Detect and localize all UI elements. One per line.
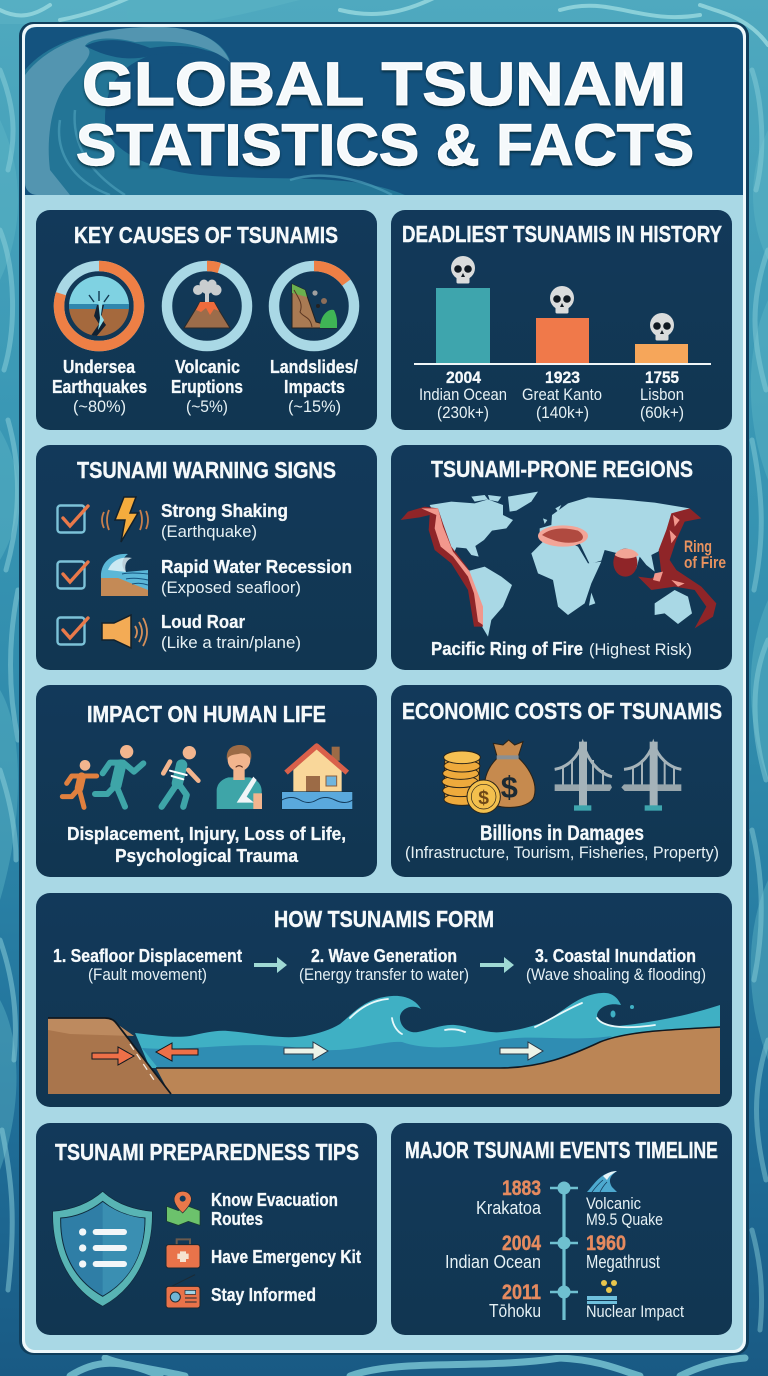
- title: [76, 50, 694, 178]
- label: 1923 Great Kanto: [522, 368, 602, 422]
- text: know evacuation routes: [211, 1190, 338, 1229]
- event: 2011 Tohoku: [489, 1281, 541, 1321]
- icon: radio: [166, 1275, 200, 1308]
- event: 2011 Tohoku: 2011: [502, 1281, 541, 1304]
- label: landslides and impacts: Impacts: [284, 377, 345, 397]
- label: landslides and impacts: [270, 357, 358, 416]
- step 3: coastal inundation: [526, 946, 706, 984]
- text: loud roar: Loud Roar: [161, 612, 245, 632]
- label: volcanic eruptions: (~5%): [186, 398, 228, 416]
- text: loud roar: [161, 612, 301, 652]
- label: undersea earthquakes: Undersea: [63, 357, 136, 377]
- icon: breaking wave: [25, 27, 405, 195]
- icon: broken bridge: [555, 742, 681, 811]
- event: volcanic M9.5 quake: [586, 1195, 663, 1229]
- wave highlights: [350, 999, 655, 1034]
- label: 1923 Great Kanto: 1923: [545, 368, 580, 387]
- caption: billions in damages: [405, 822, 719, 862]
- donut: landslides and impacts 15%: [274, 266, 354, 346]
- text: strong shaking: (Earthquake): [161, 523, 257, 541]
- label: volcanic eruptions: Volcanic: [175, 357, 240, 377]
- icon: injured person: [162, 746, 198, 807]
- icon: wave: [587, 1171, 617, 1192]
- heading: warning signs: TSUNAMI WARNING SIGNS: [77, 457, 336, 483]
- step 2: wave generation: [299, 946, 469, 984]
- panel: tsunami-prone regions: [391, 445, 732, 670]
- event: 2011 Tohoku: Tōhoku: [489, 1301, 541, 1321]
- label: 1923 Great Kanto: Great Kanto: [522, 386, 602, 404]
- water: teal surface with breaking waves: [135, 993, 720, 1068]
- heading: human impact: IMPACT ON HUMAN LIFE: [87, 701, 326, 727]
- text: rapid water recession: (Exposed seafloor): [161, 579, 301, 597]
- icon: money bag: [484, 740, 535, 807]
- callout: ring of fire: [684, 537, 726, 572]
- icon: flooded house: [282, 746, 353, 809]
- bar chart: death tolls: [414, 288, 711, 365]
- panel: deadliest tsunamis in history: [391, 210, 732, 430]
- panel: key causes of tsunamis: [36, 210, 377, 430]
- heading: key causes: KEY CAUSES OF TSUNAMIS: [74, 222, 338, 248]
- event: volcanic M9.5 quake: M9.5 Quake: [586, 1211, 663, 1229]
- text: rapid water recession: Rapid Water Recession: [161, 557, 352, 577]
- label: volcanic eruptions: Eruptions: [171, 377, 243, 397]
- icon: skull 2004: [451, 256, 475, 284]
- label: 1923 Great Kanto: (140k+): [536, 404, 589, 422]
- checkbox: strong shaking: [58, 506, 88, 532]
- label: 2004 Indian Ocean: [419, 368, 507, 422]
- text: have emergency kit: Have Emergency Kit: [211, 1247, 361, 1267]
- event: 2004 Indian Ocean: Indian Ocean: [445, 1252, 541, 1272]
- arrow: wave approaching shore: [500, 1042, 543, 1060]
- water: deep layer: [142, 1036, 612, 1068]
- title: STATISTICS & FACTS: [76, 113, 694, 178]
- event: nuclear impact: Nuclear Impact: [586, 1303, 684, 1321]
- step 1: seafloor displacement: 1. Seafloor Displacement: [53, 946, 242, 966]
- caption: highest risk: Pacific Ring of Fire: [431, 639, 583, 659]
- caption: highest risk: (Highest Risk): [589, 641, 692, 659]
- icon: first aid kit: [166, 1239, 200, 1268]
- event: volcanic M9.5 quake: Volcanic: [586, 1195, 641, 1213]
- text: stay informed: Stay Informed: [211, 1285, 316, 1305]
- arrow: fault pushing left: [156, 1043, 198, 1061]
- checkbox: rapid water recession: [58, 562, 88, 588]
- text: know evacuation routes: Know Evacuation: [211, 1190, 338, 1210]
- caption: human impact summary: [67, 824, 346, 866]
- icon: checklist shield: [53, 1191, 152, 1306]
- event: 1960 megathrust: Megathrust: [586, 1252, 660, 1272]
- icon: money bag: $: [501, 770, 518, 804]
- icon: running adult: [95, 745, 143, 807]
- arrow: fault pushing right: [92, 1047, 134, 1065]
- event: 1883 Krakatoa: Krakatoa: [476, 1198, 542, 1218]
- caption: billions in damages: (Infrastructure, Tourism, Fisheries, Property): [405, 844, 719, 862]
- label: 2004 Indian Ocean: Indian Ocean: [419, 386, 507, 404]
- text: rapid water recession: [161, 557, 352, 597]
- label: undersea earthquakes: (~80%): [73, 398, 126, 416]
- heading: prone regions: TSUNAMI-PRONE REGIONS: [431, 456, 693, 482]
- timeline axis and nodes: [550, 1182, 578, 1320]
- label: 1755 Lisbon: [640, 368, 684, 422]
- icon: nuclear hazard over water: [587, 1280, 617, 1304]
- arrow: step 1 to 2: [254, 957, 287, 973]
- continental block and fault: [48, 1018, 171, 1094]
- icon: coin stack: [442, 751, 480, 805]
- label: volcanic eruptions: [171, 357, 243, 416]
- heading: how tsunamis form: HOW TSUNAMIS FORM: [274, 906, 494, 932]
- label: undersea earthquakes: Earthquakes: [52, 377, 147, 397]
- event: 2004 Indian Ocean: [445, 1232, 541, 1272]
- label: 1755 Lisbon: 1755: [645, 368, 679, 387]
- label: 2004 Indian Ocean: (230k+): [437, 404, 489, 422]
- step 2: wave generation: 2. Wave Generation: [311, 946, 457, 966]
- icon: dollar coin: $: [478, 788, 489, 809]
- arrow: wave travel: [284, 1042, 328, 1060]
- callout: ring of fire: of Fire: [684, 553, 726, 572]
- icon: skull 1755: [650, 313, 674, 340]
- arrow: step 2 to 3: [480, 957, 514, 973]
- panel: major tsunami events timeline: [391, 1123, 732, 1335]
- label: undersea earthquakes: [52, 357, 147, 416]
- icons: people and flooded house: [62, 745, 353, 809]
- donut: volcanic eruptions 5%: [167, 266, 247, 346]
- icon: skull 1923: [550, 286, 574, 314]
- heading: preparedness tips: TSUNAMI PREPAREDNESS TIPS: [55, 1139, 359, 1165]
- caption: human impact summary: Displacement, Injury, Loss of Life,: [67, 824, 346, 844]
- text: strong shaking: [161, 501, 288, 541]
- text: strong shaking: Strong Shaking: [161, 501, 288, 521]
- event: 1960 megathrust: [586, 1232, 660, 1272]
- icon: loudspeaker: [102, 615, 147, 648]
- text: loud roar: (Like a train/plane): [161, 634, 301, 652]
- title: GLOBAL TSUNAMI: [82, 50, 686, 118]
- cross-section diagram: tsunami formation: [48, 993, 720, 1094]
- caption: human impact summary: Psychological Trauma: [115, 846, 299, 866]
- label: 2004 Indian Ocean: 2004: [446, 368, 481, 387]
- panel: economic costs of tsunamis: [391, 685, 732, 877]
- panel: impact on human life: [36, 685, 377, 877]
- seabed and coastal slope: [156, 1027, 720, 1094]
- event: 2004 Indian Ocean: 2004: [502, 1232, 541, 1255]
- world map with ring of fire: [401, 492, 716, 637]
- event: 1960 megathrust: 1960: [586, 1232, 626, 1255]
- step 2: wave generation: (Energy transfer to water): [299, 966, 469, 984]
- callout: ring of fire: Ring: [684, 537, 712, 556]
- checkbox: loud roar: [58, 618, 88, 644]
- step 3: coastal inundation: 3. Coastal Inundation: [535, 946, 696, 966]
- caption: highest risk: [431, 639, 692, 659]
- step 1: seafloor displacement: (Fault movement): [88, 966, 207, 984]
- icons: money and broken bridge: [442, 740, 681, 813]
- step 3: coastal inundation: (Wave shoaling & flooding): [526, 966, 706, 984]
- panel: tsunami warning signs: [36, 445, 377, 670]
- panel: preparedness tips: [36, 1123, 377, 1335]
- heading: economic costs: ECONOMIC COSTS OF TSUNAMIS: [402, 698, 722, 724]
- icon: dollar coin: [467, 780, 500, 813]
- icon: map with location pin: [167, 1191, 200, 1225]
- caption: billions in damages: Billions in Damages: [480, 822, 644, 845]
- label: landslides and impacts: Landslides/: [270, 357, 358, 377]
- icon: receding wave and seafloor: [101, 554, 148, 596]
- label: 1755 Lisbon: (60k+): [640, 404, 684, 422]
- header banner: [25, 27, 743, 195]
- icon: person with arm sling: [217, 745, 262, 809]
- icon: running child: [62, 760, 97, 807]
- event: 1883 Krakatoa: 1883: [502, 1177, 541, 1200]
- text: know evacuation routes: Routes: [211, 1209, 263, 1229]
- label: landslides and impacts: (~15%): [288, 398, 341, 416]
- donut: undersea earthquakes 80%: [59, 266, 139, 346]
- icon: lightning bolt with tremor lines: [102, 497, 148, 542]
- step 1: seafloor displacement: [53, 946, 242, 984]
- label: 1755 Lisbon: Lisbon: [640, 386, 684, 404]
- panel: how tsunamis form: [36, 893, 732, 1107]
- event: 1883 Krakatoa: [476, 1177, 542, 1218]
